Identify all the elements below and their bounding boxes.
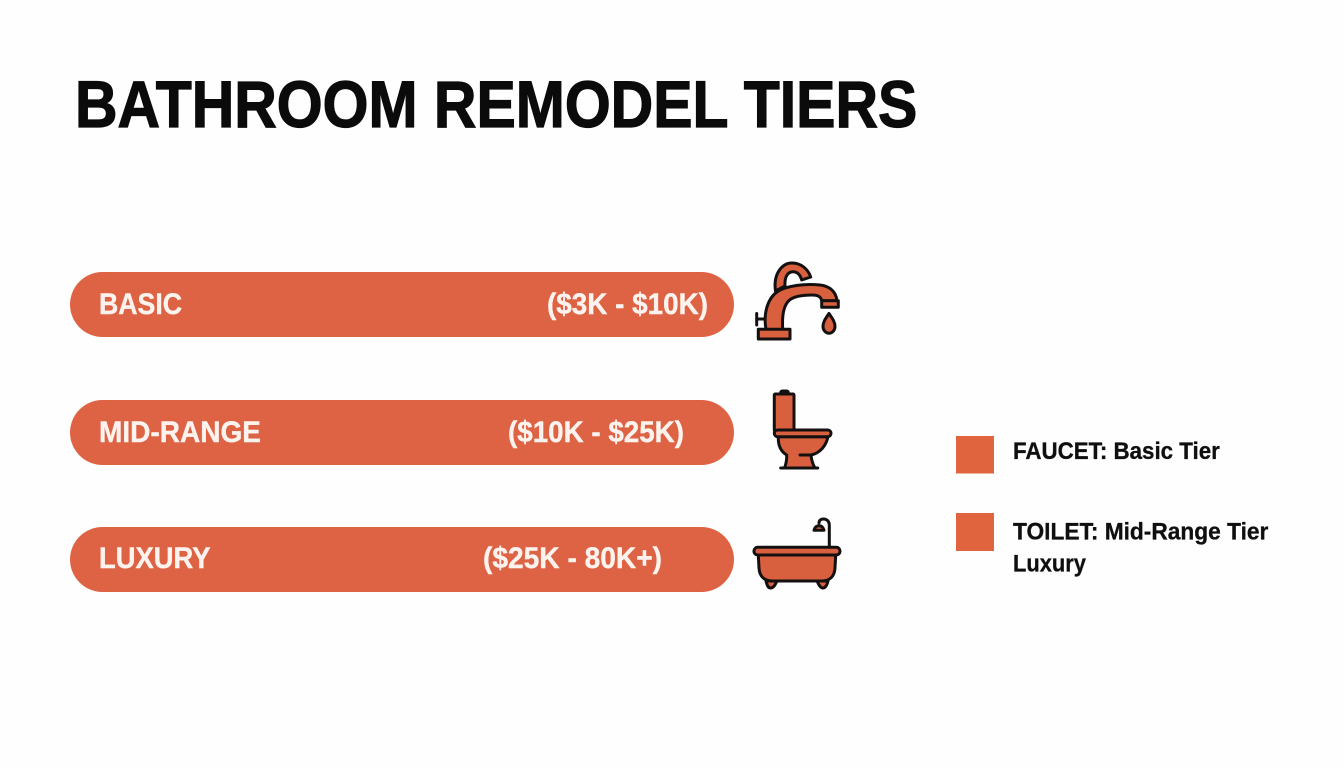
panel: mid-range tier bar — [70, 400, 734, 465]
basic label: BASIC — [99, 288, 182, 321]
legend — [956, 436, 1268, 577]
panel: luxury tier bar — [70, 527, 734, 592]
legend label: toilet: TOILET: Mid-Range Tier — [1013, 518, 1268, 545]
luxury price: ($25K - 80K+) — [483, 542, 662, 575]
mid-range label: MID-RANGE — [99, 416, 261, 449]
legend swatch: faucet — [956, 436, 994, 474]
mid-range price: ($10K - $25K) — [508, 416, 684, 449]
luxury label: LUXURY — [99, 542, 210, 575]
panel: basic tier bar — [70, 272, 734, 337]
icon: toilet — [774, 391, 831, 468]
icon: faucet — [757, 263, 838, 339]
basic price: ($3K - $10K) — [547, 288, 708, 321]
legend swatch: toilet — [956, 513, 994, 551]
icon: bathtub — [754, 519, 840, 588]
legend label: faucet: FAUCET: Basic Tier — [1013, 437, 1220, 464]
legend label: luxury: Luxury — [1013, 550, 1086, 577]
title: BATHROOM REMODEL TIERS — [75, 68, 917, 142]
